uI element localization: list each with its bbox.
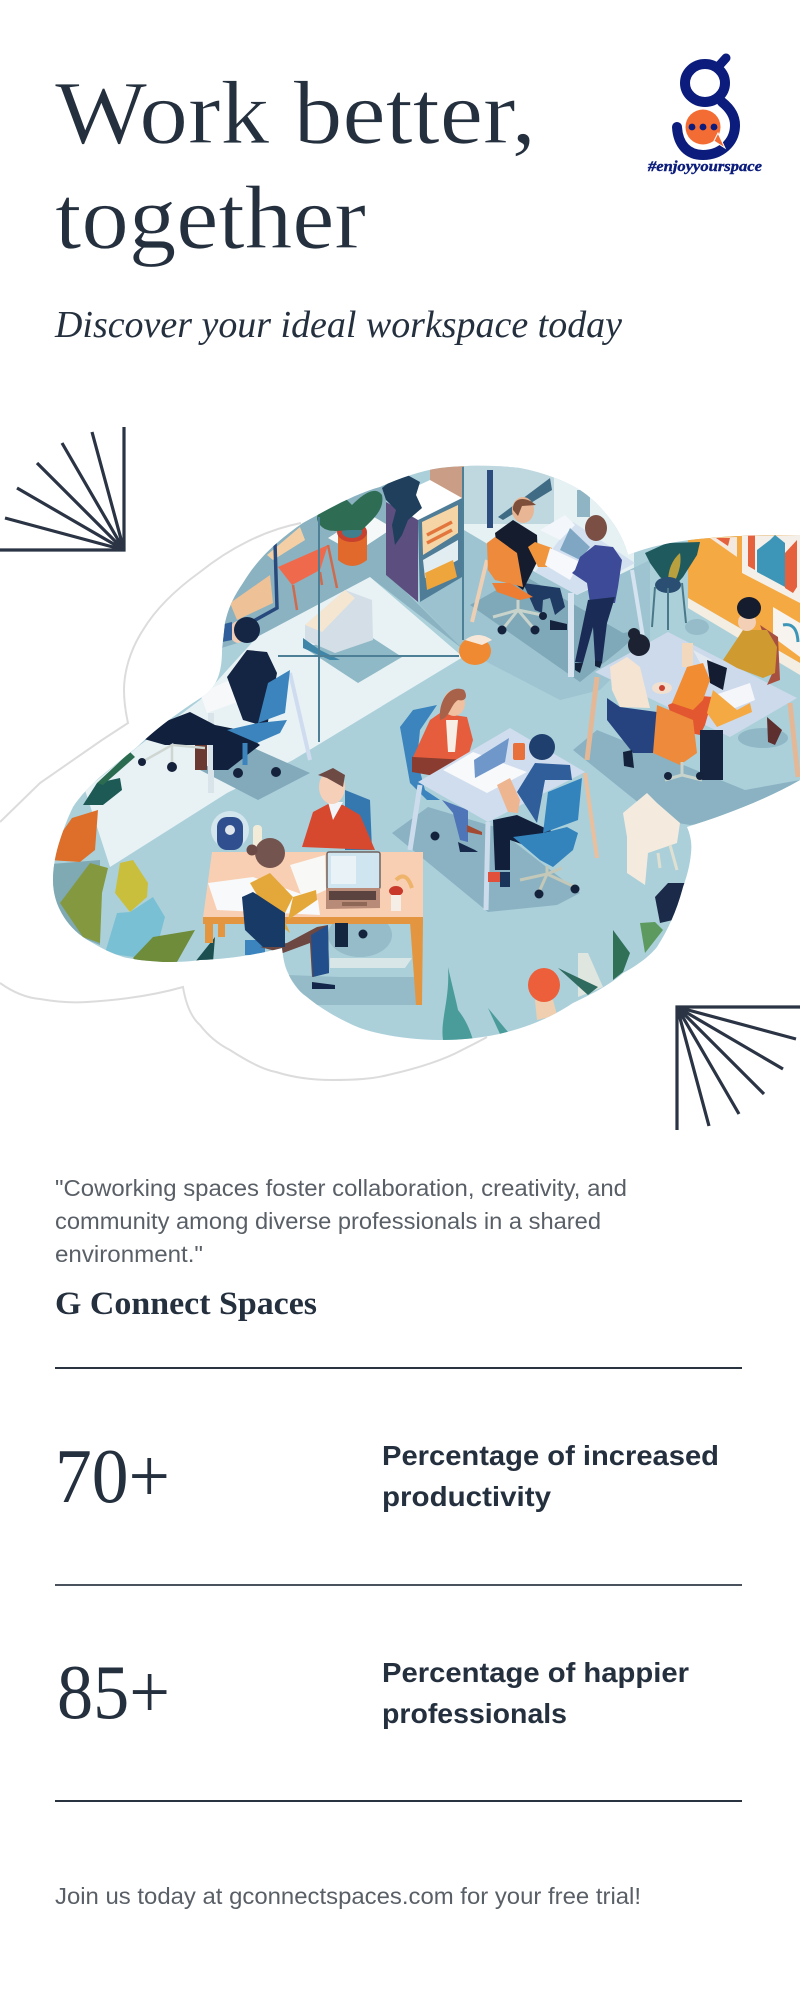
illustration: coworking office — [53, 466, 800, 1040]
stat label: productivity — [382, 1481, 551, 1512]
window area — [430, 466, 634, 595]
right shared table with three people — [587, 597, 798, 780]
mustard man — [760, 625, 780, 685]
laptop — [474, 738, 509, 778]
cloud outline — [0, 523, 487, 1080]
hanging plant — [382, 472, 422, 545]
floor — [53, 466, 800, 1040]
floor shadow and slab — [288, 975, 420, 1005]
title: together — [55, 169, 366, 268]
quote text: community among diverse professionals in a shared — [55, 1208, 601, 1234]
stat label: Percentage of increased — [382, 1440, 719, 1471]
center table rug — [392, 807, 580, 912]
stat: 70+ — [55, 1433, 719, 1519]
laptop — [560, 528, 590, 560]
icon: top-left ray fan — [0, 427, 124, 550]
orange ball lamp — [459, 635, 492, 665]
stat: 85+ — [57, 1649, 689, 1735]
cream chair — [623, 793, 680, 885]
bookshelf — [382, 472, 462, 602]
light zone — [85, 577, 463, 867]
bottom plants and person — [442, 922, 663, 1040]
stat number: 70+ — [55, 1433, 170, 1519]
orange wall with pictures — [688, 530, 800, 675]
title — [55, 64, 536, 268]
navy object right — [655, 883, 687, 923]
panel: testimonial — [55, 1175, 627, 1322]
center table with two people — [400, 689, 597, 910]
stat number: 85+ — [57, 1649, 170, 1735]
stat label — [382, 1440, 719, 1512]
icon: g letter with speech bubble — [677, 58, 735, 155]
plant on white stand — [317, 491, 393, 566]
quote text: environment." — [55, 1241, 203, 1267]
right rug — [573, 730, 800, 825]
stat label: professionals — [382, 1698, 567, 1729]
quote text — [55, 1175, 627, 1267]
subtitle: Discover your ideal workspace today — [54, 304, 622, 346]
table top — [203, 852, 423, 918]
wood bench, red chair and window frame — [230, 527, 337, 623]
stat label: Percentage of happier — [382, 1657, 689, 1688]
man in blue t-shirt — [497, 778, 520, 813]
papers — [718, 683, 755, 708]
swirl picture — [773, 607, 800, 657]
papers — [290, 855, 326, 900]
quote text: "Coworking spaces foster collaboration, creativity, and — [55, 1175, 627, 1201]
woman in red — [400, 705, 440, 800]
cup and food — [682, 643, 693, 667]
table — [418, 728, 585, 822]
chart picture — [742, 535, 800, 603]
orange-haired woman — [668, 695, 713, 735]
logo — [647, 58, 762, 175]
bottom left plants — [40, 752, 215, 965]
stat label — [382, 1657, 689, 1729]
standing man — [585, 515, 607, 541]
glass partition lines — [278, 467, 463, 742]
laptop — [327, 852, 380, 889]
man in red — [345, 790, 372, 850]
cup — [389, 876, 412, 911]
rug under desk — [470, 575, 643, 682]
robot device — [211, 811, 262, 870]
title: Work better, — [55, 64, 536, 163]
desk with seated man and standing man — [472, 497, 643, 677]
woman with bun — [628, 634, 650, 656]
woman in yellow — [335, 923, 348, 947]
cube with shadow — [303, 590, 402, 683]
upper left room floor — [215, 480, 464, 650]
seated man — [493, 600, 542, 630]
floor right of desk — [464, 530, 650, 700]
logo tagline: #enjoyyourspace — [647, 159, 762, 175]
call to action: Join us today at gconnectspaces.com for your free trial! — [55, 1883, 641, 1909]
laptop — [693, 650, 712, 672]
icon: bottom-right ray fan — [677, 1007, 800, 1130]
left seated man with blue chair — [130, 617, 310, 800]
bottom peach table with two people — [203, 768, 423, 1005]
plant on stand — [645, 542, 709, 635]
quote author: G Connect Spaces — [55, 1286, 317, 1322]
